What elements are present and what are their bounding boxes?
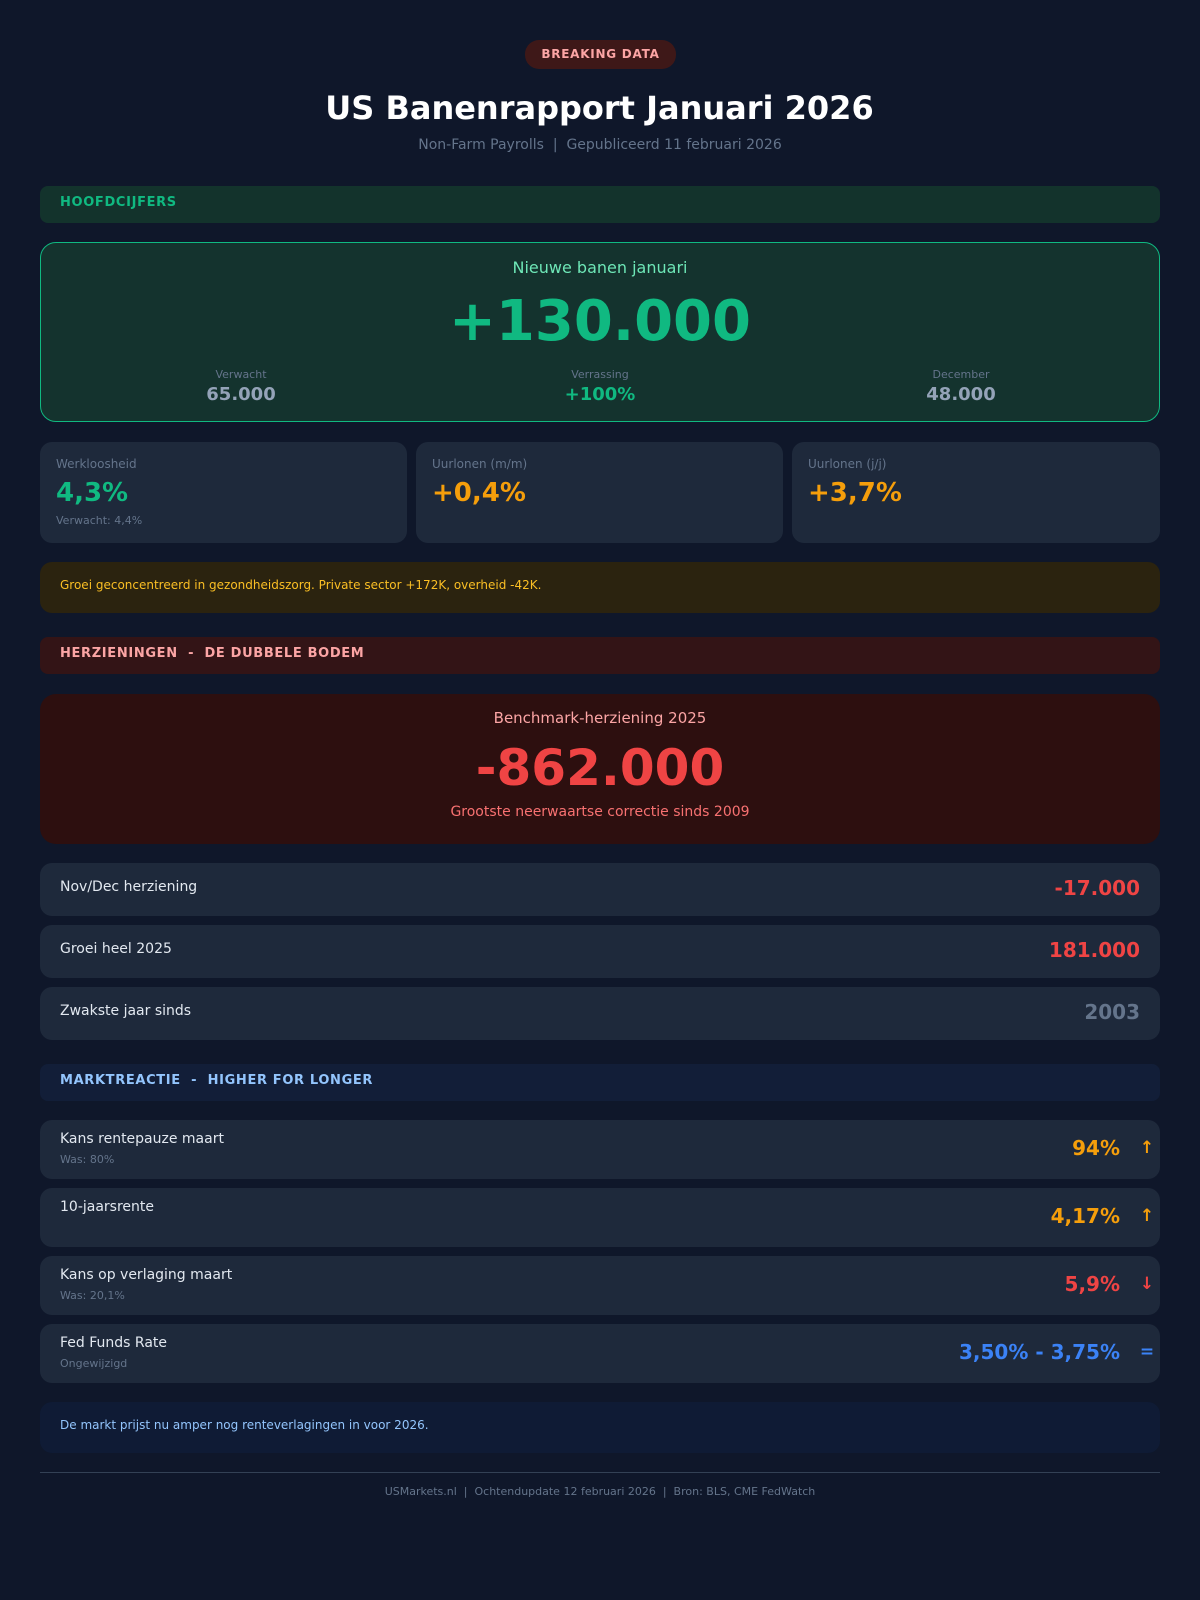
row value: 5,9% xyxy=(1065,1272,1120,1296)
row value: 181.000 xyxy=(1049,938,1140,962)
icon: arrow up: ↑ xyxy=(1140,1138,1154,1158)
row: fed funds rate xyxy=(40,1324,1160,1383)
icon: equals: = xyxy=(1140,1342,1154,1362)
section heading: marktreactie xyxy=(40,1064,1160,1101)
row: 10-jaarsrente xyxy=(40,1188,1160,1247)
row: kans op verlaging maart xyxy=(40,1256,1160,1315)
section heading: hoofdcijfers: HOOFDCIJFERS xyxy=(60,195,177,210)
stat: december: December xyxy=(932,368,990,381)
badge: breaking data: BREAKING DATA xyxy=(541,47,660,61)
row label: 10-jaarsrente xyxy=(60,1199,154,1215)
row value: 3,50% - 3,75% xyxy=(959,1340,1120,1364)
row value: 2003 xyxy=(1084,1000,1140,1024)
section heading: hoofdcijfers xyxy=(40,186,1160,223)
stat: december: 48.000 xyxy=(926,384,996,405)
callout: groei geconcentreerd: Groei geconcentreerd in gezondheidszorg. Private sector +172K, overheid -42K. xyxy=(60,578,541,592)
section heading: marktreactie: MARKTREACTIE - HIGHER FOR LONGER xyxy=(60,1073,373,1088)
stat: verwacht: 65.000 xyxy=(206,384,276,405)
icon: arrow down: ↓ xyxy=(1140,1274,1154,1294)
row label: Nov/Dec herziening xyxy=(60,879,197,895)
card value: 4,3% xyxy=(56,478,128,508)
benchmark number: -862.000 xyxy=(476,739,724,797)
row label: Groei heel 2025 xyxy=(60,941,172,957)
card label: Uurlonen (j/j) xyxy=(808,457,886,471)
row note: Ongewijzigd xyxy=(60,1357,127,1370)
hero label: Nieuwe banen januari xyxy=(513,258,687,277)
callout: markt prijst renteverlagingen: De markt prijst nu amper nog renteverlagingen in voor 2026. xyxy=(60,1418,429,1432)
hero number: +130.000 xyxy=(449,289,751,354)
card note: Verwacht: 4,4% xyxy=(56,514,142,527)
section heading: herzieningen: HERZIENINGEN - DE DUBBELE BODEM xyxy=(60,646,364,661)
row value: -17.000 xyxy=(1055,876,1140,900)
stat: verrassing: +100% xyxy=(565,384,635,405)
stat: verrassing: Verrassing xyxy=(571,368,629,381)
title: US Banenrapport Januari 2026 xyxy=(325,89,874,127)
benchmark label: Benchmark-herziening 2025 xyxy=(494,709,706,727)
subtitle: Non-Farm Payrolls | Gepubliceerd 11 februari 2026 xyxy=(418,137,782,153)
row label: Zwakste jaar sinds xyxy=(60,1003,191,1019)
card label: Uurlonen (m/m) xyxy=(432,457,527,471)
row note: Was: 80% xyxy=(60,1153,114,1166)
stat: december xyxy=(926,368,996,405)
card: uurlonen jaar op jaar xyxy=(792,442,1160,543)
stat: verwacht xyxy=(206,368,276,405)
row: kans rentepauze maart xyxy=(40,1120,1160,1179)
stat: verwacht: Verwacht xyxy=(215,368,267,381)
row value: 4,17% xyxy=(1051,1204,1120,1228)
row: zwakste jaar sinds xyxy=(40,987,1160,1040)
footer: USMarkets.nl | Ochtendupdate 12 februari 2026 | Bron: BLS, CME FedWatch xyxy=(385,1485,815,1498)
card: uurlonen maand op maand xyxy=(416,442,783,543)
row label: Kans rentepauze maart xyxy=(60,1131,224,1147)
row note: Was: 20,1% xyxy=(60,1289,125,1302)
row value: 94% xyxy=(1072,1136,1120,1160)
icon: arrow up: ↑ xyxy=(1140,1206,1154,1226)
panel: benchmark-herziening xyxy=(40,694,1160,844)
card label: Werkloosheid xyxy=(56,457,137,471)
callout: groei geconcentreerd xyxy=(40,562,1160,613)
section heading: herzieningen xyxy=(40,637,1160,674)
row: nov/dec herziening xyxy=(40,863,1160,916)
row label: Kans op verlaging maart xyxy=(60,1267,232,1283)
row: groei heel 2025 xyxy=(40,925,1160,978)
callout: markt prijst renteverlagingen xyxy=(40,1402,1160,1453)
card value: +0,4% xyxy=(432,478,526,508)
row label: Fed Funds Rate xyxy=(60,1335,167,1351)
card: werkloosheid xyxy=(40,442,407,543)
stat: verrassing xyxy=(565,368,635,405)
card value: +3,7% xyxy=(808,478,902,508)
panel: nieuwe banen januari xyxy=(40,242,1160,422)
badge: breaking data xyxy=(525,40,676,69)
benchmark note: Grootste neerwaartse correctie sinds 2009 xyxy=(450,804,750,820)
